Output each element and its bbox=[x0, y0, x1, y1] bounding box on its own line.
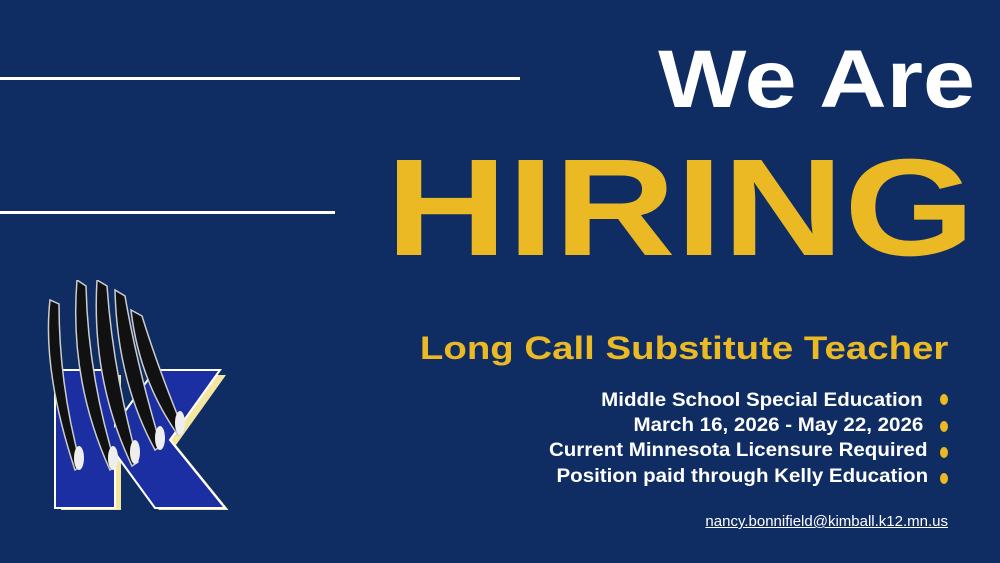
contact email: nancy.bonnifield@kimball.k12.mn.us bbox=[705, 513, 948, 530]
bullet 4: Position paid through Kelly Education bbox=[556, 466, 928, 487]
bullet 1: Middle School Special Education bbox=[601, 390, 923, 411]
bullet 3: Current Minnesota Licensure Required bbox=[549, 440, 928, 461]
bullet dots bbox=[940, 394, 948, 484]
bullet list bbox=[549, 390, 928, 487]
subtitle: position: Long Call Substitute Teacher bbox=[420, 330, 948, 366]
heading: We Are: We Are bbox=[658, 34, 975, 125]
decorative line top bbox=[0, 77, 520, 80]
logo: K with claws bbox=[48, 280, 228, 510]
heading: HIRING: HIRING bbox=[386, 131, 975, 285]
bullet 2: March 16, 2026 - May 22, 2026 bbox=[633, 415, 923, 436]
decorative line bottom bbox=[0, 211, 335, 214]
